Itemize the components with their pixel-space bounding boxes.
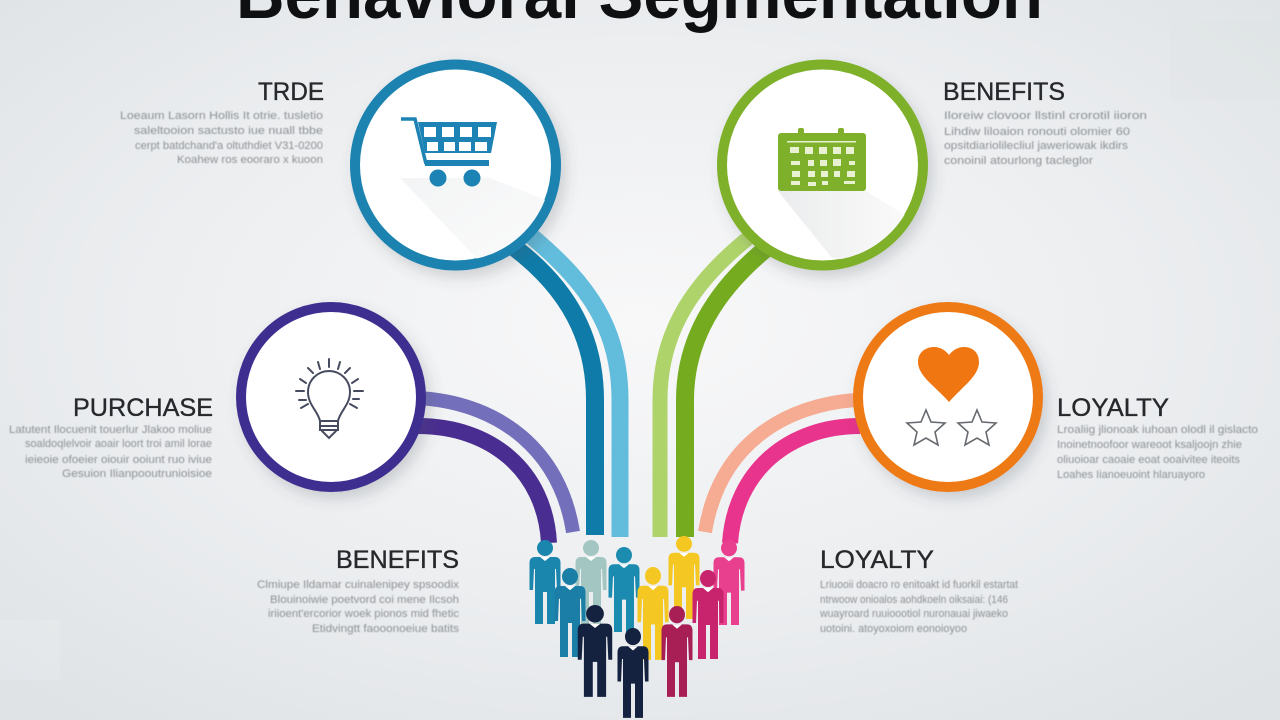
ribbon: dark green: [685, 247, 768, 537]
text: BENEFITS top: conoinil atourlong tacleglor: [944, 155, 1093, 167]
text: BENEFITS top: opsitdiariolilecliul jaweriowak ikdirs: [944, 140, 1129, 152]
text: LOYALTY right: Loahes Iianoeuoint hlaruayoro: [1057, 469, 1205, 481]
text: PURCHASE: ieieoie ofoeier oiouir ooiunt ruo iviue: [25, 454, 212, 466]
text: TRDE: TRDE: [258, 78, 324, 106]
circle: benefits calendar: [722, 64, 923, 266]
text: BENEFITS top: Iloreiw clovoor llstinl crorotil iioron: [944, 110, 1147, 122]
text: BENEFITS lower: [257, 546, 460, 635]
circle: loyalty heart and stars: [858, 307, 1038, 487]
icon: stars: [907, 410, 996, 445]
text: LOYALTY right: Lroaliig jlionoak iuhoan olodl il gislacto: [1057, 424, 1258, 436]
text: LOYALTY lower: wuayroard ruuioootiol nuronauai jiwaeko: [819, 608, 1008, 620]
text: PURCHASE: soaldoqlelvoir aoair loort troi amil lorae: [25, 438, 212, 450]
ribbon: dark blue: [515, 248, 595, 535]
text: LOYALTY right: Inoinetnoofoor wareoot ksaljoojn zhie: [1057, 439, 1242, 451]
circle: purchase lightbulb: [241, 307, 421, 487]
ribbon: pink: [730, 426, 860, 543]
text: PURCHASE: Latutent Ilocuenit touerlur Jlakoo moliue: [9, 424, 212, 436]
icon: shopping cart: [401, 119, 497, 186]
text: LOYALTY right: oliuoioar caoaie eoat ooaivitee iteoits: [1057, 454, 1240, 466]
text: TRDE: saleltooion sactusto iue nuall tbbe: [134, 125, 323, 137]
text: TRDE: Koahew ros eooraro x kuoon: [177, 154, 323, 166]
text: PURCHASE: PURCHASE: [73, 394, 213, 422]
text: PURCHASE: [9, 394, 213, 480]
text: LOYALTY lower: LOYALTY: [820, 546, 934, 574]
text: BENEFITS lower: iriioent'ercorior woek pionos mid fhetic: [268, 608, 460, 620]
ribbon: light purple: [425, 398, 573, 532]
ribbon: light green: [660, 235, 752, 537]
text: BENEFITS lower: Blouinoiwie poetvord coi mene Ilcsoh: [270, 594, 459, 606]
text: BENEFITS lower: Clmiupe Ildamar cuinalenipey spsoodix: [257, 579, 460, 591]
text: TRDE: cerpt batdchand'a oltuthdiet V31-0200: [135, 140, 323, 152]
text: BENEFITS lower: Etidvingtt faooonoeiue batits: [312, 623, 460, 635]
text: BENEFITS top: [943, 78, 1147, 167]
text: LOYALTY right: LOYALTY: [1057, 394, 1169, 422]
icon: calendar: [778, 128, 866, 191]
text: TRDE: [120, 78, 324, 166]
ribbon: dark purple: [418, 426, 549, 543]
icon: lightbulb: [296, 359, 363, 438]
ribbon: peach: [705, 400, 855, 532]
text: LOYALTY lower: [819, 546, 1018, 635]
text: BENEFITS top: Lihdiw liloaion ronouti olomier 60: [944, 126, 1130, 138]
text: TRDE: Loeaum Lasorn Hollis It otrie. tusletio: [120, 110, 323, 122]
icon: heart: [918, 347, 979, 402]
people group: [530, 536, 744, 718]
text: LOYALTY lower: uotoini. atoyoxoiom eonoioyoo: [820, 623, 967, 635]
circle: trade cart: [355, 64, 556, 270]
text: BENEFITS lower: BENEFITS: [336, 546, 459, 574]
text: LOYALTY lower: Lriuooii doacro ro enitoakt id fuorkil estartat: [820, 579, 1018, 591]
text: LOYALTY right: [1057, 394, 1258, 481]
connector ribbons: [418, 235, 860, 543]
text: LOYALTY lower: ntrwoow onioalos aohdkoeln oiksaiai: (146: [820, 594, 1008, 606]
text: BENEFITS top: BENEFITS: [943, 78, 1065, 106]
ribbon: light blue: [530, 235, 620, 537]
text: PURCHASE: Gesuion Ilianpooutrunioisioe: [62, 468, 212, 480]
